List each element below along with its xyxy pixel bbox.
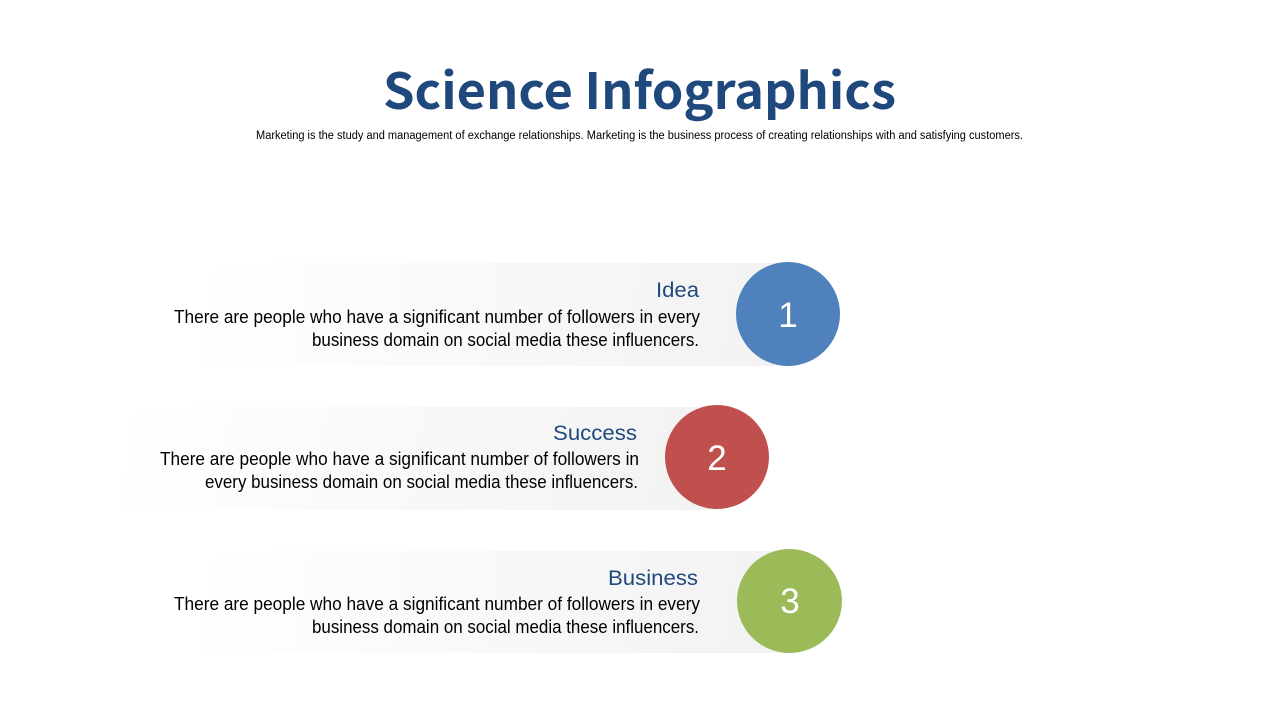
panel background: step 2 xyxy=(110,407,717,510)
text block: step 2 description: every business domain on social media these influencers. xyxy=(205,472,638,492)
panel background: step 3 xyxy=(170,551,790,653)
icon: number 2 circle xyxy=(665,405,769,509)
title: Science Infographics xyxy=(383,52,896,124)
text block: step 2 description: There are people who have a significant number of followers in xyxy=(160,449,639,469)
panel: step 3 business xyxy=(170,549,842,653)
text block: step 1 description: There are people who have a significant number of followers in every xyxy=(174,307,700,327)
icon: number 2 circle: 2 xyxy=(707,439,727,478)
heading: success: Success xyxy=(553,422,637,445)
text block: step 1 description xyxy=(174,307,700,350)
icon: number 1 circle: 1 xyxy=(778,296,798,335)
text block: step 3 description xyxy=(174,594,700,637)
icon: number 3 circle xyxy=(737,549,842,653)
text block: step 2 description xyxy=(160,449,639,492)
icon: number 1 circle xyxy=(736,262,840,366)
subtitle: Marketing is the study and management of exchange relationships. Marketing is the business process of creating relationships with and satisfying customers. xyxy=(256,130,1023,142)
heading: idea: Idea xyxy=(656,279,699,302)
text block: step 3 description: business domain on social media these influencers. xyxy=(312,617,699,637)
text block: step 3 description: There are people who have a significant number of followers in every xyxy=(174,594,700,614)
panel: step 2 success xyxy=(110,405,769,510)
icon: number 3 circle: 3 xyxy=(780,582,800,621)
text block: step 1 description: business domain on social media these influencers. xyxy=(312,330,699,350)
heading: business: Business xyxy=(608,567,698,590)
panel: step 1 idea xyxy=(170,262,840,366)
panel background: step 1 xyxy=(170,263,788,366)
